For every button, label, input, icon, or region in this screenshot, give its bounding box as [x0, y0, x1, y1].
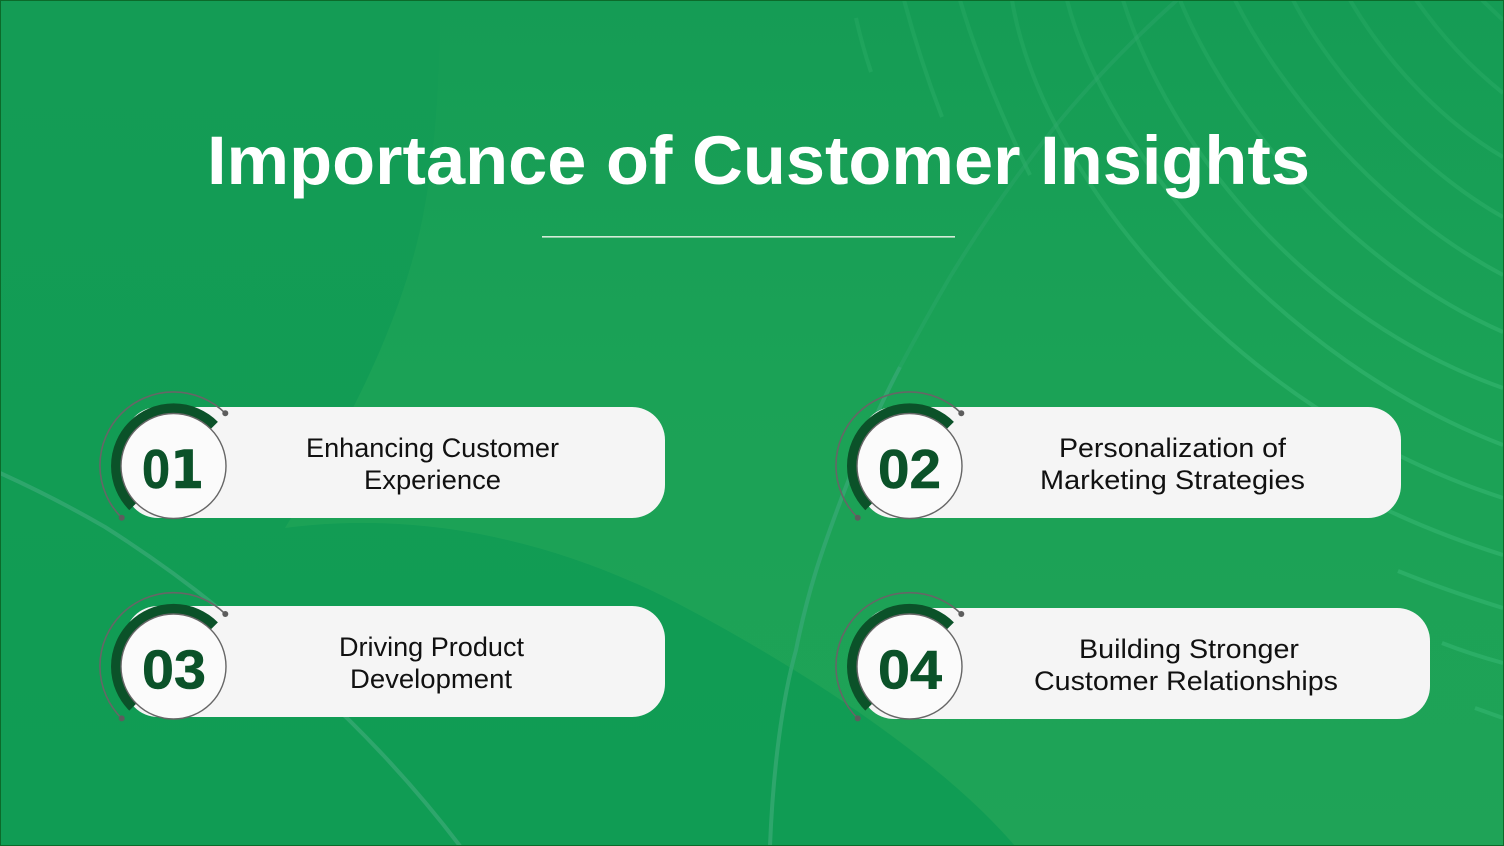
card 04 text: Building Stronger [1079, 634, 1299, 664]
number badge 02 [836, 392, 964, 521]
pill 04 [861, 608, 1430, 719]
card 01 text [306, 433, 559, 495]
card 02 text [1040, 433, 1305, 495]
number badge 04 [836, 593, 964, 721]
card 04 [836, 593, 1430, 721]
card 04 text: Customer Relationships [1034, 666, 1338, 696]
card 02 text: Personalization of [1059, 433, 1287, 463]
number badge 03 [100, 593, 228, 721]
number badge 02: 02 [878, 438, 941, 500]
card 01 [100, 392, 665, 521]
pill 03 [125, 606, 665, 717]
card 01 text: Experience [364, 465, 501, 495]
card 04 text [1034, 634, 1338, 696]
title divider [542, 236, 955, 238]
card 02 text: Marketing Strategies [1040, 465, 1305, 495]
card 01 text: Enhancing Customer [306, 433, 559, 463]
number badge 01: 01 [142, 438, 204, 501]
number badge 01 [100, 392, 228, 521]
title: Importance of Customer Insights [207, 122, 1310, 199]
pill 01 [125, 407, 665, 518]
number badge 04: 04 [878, 638, 942, 700]
card 03 text [339, 632, 524, 694]
card 02 [836, 392, 1401, 521]
card 03 text: Driving Product [339, 632, 524, 662]
card 03 [100, 593, 665, 721]
number badge 03: 03 [142, 638, 206, 700]
pill 02 [861, 407, 1401, 518]
card 03 text: Development [350, 664, 513, 694]
